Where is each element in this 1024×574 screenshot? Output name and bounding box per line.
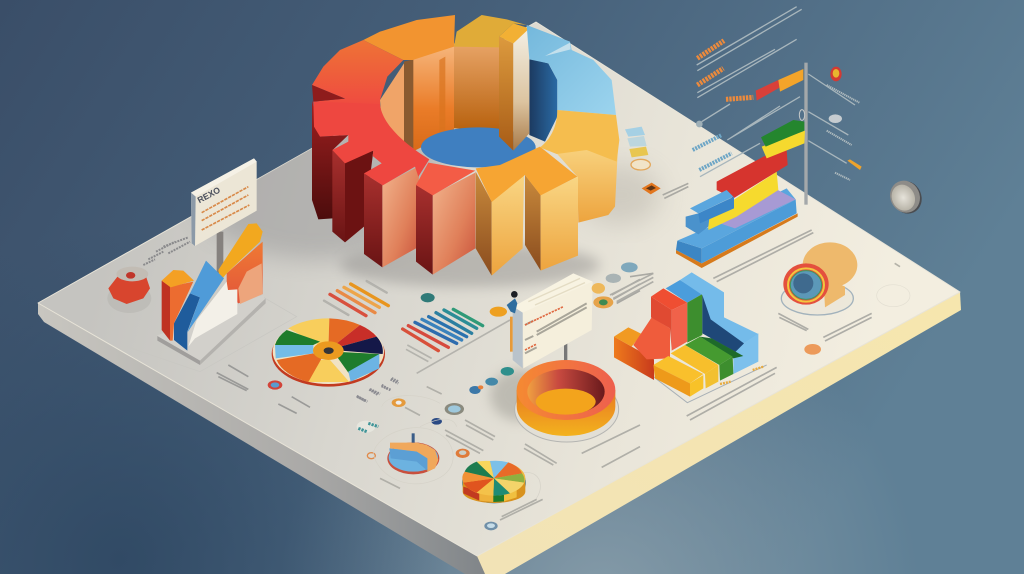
board right side — [477, 292, 961, 574]
red orange flag — [756, 69, 803, 101]
pillar — [499, 23, 529, 151]
leftmost tooth — [312, 100, 348, 219]
sign board — [191, 158, 257, 246]
small ring icon — [268, 380, 282, 390]
coral top face — [416, 163, 475, 195]
sign lines — [202, 187, 249, 230]
left chart group — [107, 158, 398, 413]
right peak — [218, 223, 263, 304]
orange top sector — [363, 15, 455, 60]
side icons — [696, 67, 862, 170]
upper right dots — [592, 262, 638, 308]
blue labels — [693, 135, 732, 170]
swatch captions — [630, 183, 688, 277]
yellow tiny marks — [720, 367, 763, 384]
faint circle — [877, 285, 910, 307]
circular chart ring nodes — [357, 398, 498, 530]
block chart — [614, 272, 758, 397]
grey legend lines — [323, 282, 510, 373]
small dot cluster — [357, 379, 398, 402]
thin connector rings — [373, 396, 540, 508]
colour wheel — [272, 318, 385, 387]
right yellow body — [557, 140, 618, 223]
sign heading: REXO — [196, 185, 222, 205]
red top face — [313, 102, 429, 185]
main 3D donut chart — [312, 15, 619, 276]
teal dot — [421, 293, 435, 302]
orange red sector — [312, 40, 403, 107]
sign pole — [217, 232, 223, 273]
orange bar list — [324, 281, 388, 316]
board shadows — [190, 110, 660, 421]
white stripes — [188, 282, 237, 347]
fourth tooth — [416, 173, 475, 275]
legend text lines — [143, 237, 190, 265]
small pie — [462, 461, 526, 503]
mid row dots — [469, 367, 514, 394]
orange token — [490, 307, 507, 317]
lower centre group — [323, 262, 640, 530]
third tooth — [364, 166, 419, 267]
floating text lines — [697, 7, 855, 177]
lens object — [781, 242, 857, 315]
upper right floating chart — [625, 7, 927, 277]
chart base plate — [157, 295, 266, 365]
blue peak — [174, 261, 224, 351]
second tooth — [332, 150, 373, 242]
faint line — [895, 263, 900, 267]
orange teeth — [476, 172, 578, 276]
document sign — [510, 273, 593, 368]
body lines — [380, 387, 640, 520]
pole — [804, 63, 808, 205]
chart area outline — [127, 293, 297, 372]
orange bowl — [515, 360, 619, 442]
orange circle marker — [804, 344, 821, 355]
stacked mini chart — [387, 433, 439, 474]
floating coin — [885, 176, 927, 219]
red button — [107, 267, 151, 313]
blue top sector — [527, 25, 616, 115]
dark notch — [312, 85, 345, 102]
swatches — [625, 127, 661, 194]
orange top face — [476, 147, 577, 202]
sign pole — [564, 343, 567, 362]
base outline — [653, 365, 767, 403]
yellow right top face — [540, 110, 619, 162]
right block chart group — [610, 230, 910, 420]
lines beside dots — [612, 279, 640, 303]
yellow top sectors — [454, 15, 527, 47]
hole walls and floor — [380, 43, 557, 167]
side labels — [827, 85, 859, 180]
left orange peak — [162, 270, 194, 341]
block chart captions — [610, 230, 872, 420]
person — [507, 291, 518, 313]
board left side — [38, 303, 490, 574]
blue bar list — [403, 309, 483, 351]
orange headings — [697, 41, 753, 99]
slab — [676, 120, 805, 268]
caption lines — [217, 365, 310, 413]
tiny dots — [357, 378, 398, 401]
